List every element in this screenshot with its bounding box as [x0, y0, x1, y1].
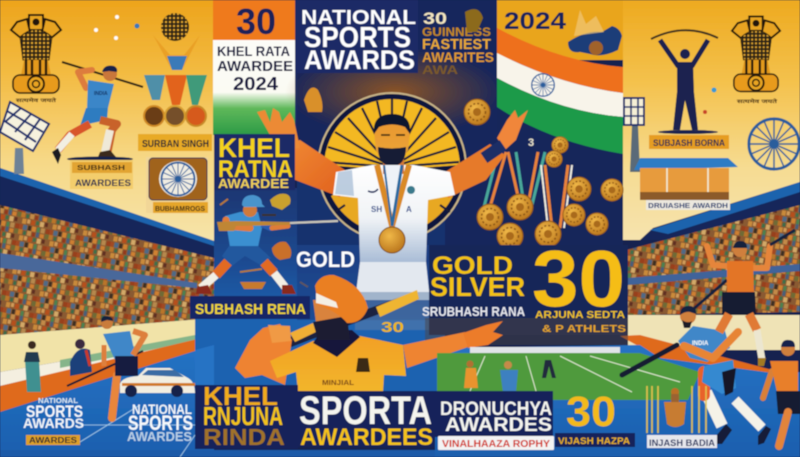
chart: playing field [437, 347, 700, 400]
torso [333, 165, 455, 262]
figure: javelin thrower [52, 62, 143, 164]
panel: national sports awards poster [285, 0, 505, 320]
arms [284, 140, 345, 197]
title: SPORTS [304, 22, 411, 54]
caption under right emblem: सत्यमेव जयते [735, 98, 779, 105]
pavilion label [646, 200, 730, 210]
panel: dronuchya awardes: VINALHAAZA ROPHY [442, 439, 550, 450]
figure: javelin thrower: INDIA [94, 91, 108, 97]
sub heading: fastest awardees: AWARITES [422, 49, 494, 65]
turban head [313, 300, 348, 338]
text: national sports awardes centre: NATIONAL [132, 401, 192, 417]
label: Surban Singh [138, 134, 212, 151]
label: awardees [70, 160, 133, 189]
label: awardees: AWARDEES [75, 178, 131, 189]
panel: dronuchya awardes [435, 391, 554, 450]
silhouette: weightlifter right [651, 30, 718, 134]
badge [26, 435, 80, 445]
figures: spectators on track [24, 339, 92, 392]
icon: camera [568, 10, 622, 55]
trophy label [438, 436, 554, 450]
panel: khel rnjuna [195, 381, 298, 450]
decorative motif blobs [270, 194, 290, 210]
text: national sports awardes centre: SPORTS [128, 412, 193, 435]
label: Surban Singh: SURBAN SINGH [142, 139, 209, 150]
number: 30: 30 [236, 1, 276, 42]
panel: chakra card [146, 157, 208, 213]
sub heading: fastest awardees: FASTIEST [422, 36, 491, 53]
text: arjuna sedta: ARJUNA SEDTA [535, 310, 625, 321]
panel: right yellow backdrop [623, 0, 800, 240]
label: Vijash Hazpa: VIJASH HAZPA [558, 436, 630, 447]
panel: award ribbon tricolour [213, 0, 299, 140]
title [301, 7, 416, 75]
panel: sporta awardees: SPORTA [299, 389, 432, 433]
text: athlets: & P ATHLETS [542, 324, 626, 335]
panel: khel ratna awardee: AWARDEE [218, 176, 289, 191]
small 30: 30 [381, 319, 404, 336]
panel: khel rnjuna: RNJUNA [203, 401, 283, 431]
icon: floodlight right [624, 98, 644, 172]
detail: small coloured dots [703, 88, 716, 114]
panel: sporta awardees [298, 389, 435, 451]
panel: pavilion building: DRUIASHE AWARDH [648, 203, 728, 210]
sub heading: fastest awardees [422, 9, 494, 77]
text: national sports awards left: NATIONAL [38, 398, 79, 405]
text: national sports awards left: AWARDS [23, 415, 84, 431]
text: national sports awardes centre: AWARDES [127, 429, 192, 444]
panel: pavilion building [634, 158, 738, 210]
label: Subhash Rena [190, 296, 310, 319]
text: gold: GOLD [296, 247, 355, 272]
icon: trophy and medals left [144, 13, 207, 126]
figure: turbaned athlete with bat [235, 275, 503, 392]
year: 2024: 2024 [504, 8, 567, 35]
icon: national emblem left [11, 15, 61, 93]
figure: orange player right [763, 340, 800, 446]
text: national sports awards left: AWARDES [29, 436, 78, 445]
panel: gold silver and big 30 [422, 234, 628, 345]
left arm [235, 324, 292, 385]
neck and head [383, 150, 404, 174]
icon: white car [120, 368, 195, 397]
gold medal [379, 227, 405, 253]
heading: Awardee: AWARDEE [217, 58, 293, 75]
panel: khel rnjuna: RINDA [203, 424, 285, 450]
heading: Khel Rata: KHEL RATA [217, 43, 290, 59]
panel: dronuchya awardes: AWARDES [445, 415, 552, 436]
right arm [403, 332, 468, 368]
text: national sports awardes centre [127, 401, 193, 444]
title: AWARDS [304, 45, 415, 75]
panel: gold silver and big 30: SILVER [430, 272, 525, 302]
panel: khel ratna awardee: KHEL [218, 133, 290, 163]
title: NATIONAL [301, 7, 416, 29]
jersey label: SH [371, 205, 382, 214]
icon: national emblem right [732, 16, 780, 91]
panel: left yellow backdrop [0, 0, 214, 262]
figure: orange player raising arms [707, 230, 795, 366]
medal ribbon [377, 165, 409, 226]
figure: rifle shooter [196, 195, 338, 294]
label: Subhash Rena: SUBHASH RENA [195, 301, 306, 318]
figure: blue batter: INDIA [692, 341, 709, 347]
emblem patch and label [356, 358, 370, 372]
figure: turbaned athlete with bat: MINJIAL [322, 380, 355, 387]
figure: hockey runner [67, 316, 145, 418]
label: Subjash Borna: SUBJASH BORNA [653, 138, 725, 149]
panel: hanging medals: 3 [528, 137, 534, 149]
icon: ashoka chakra [532, 74, 554, 96]
sub heading: fastest awardees: 30 [423, 9, 447, 28]
text: national sports awards left [23, 398, 84, 445]
name: Srubhash Rana: SRUBHASH RANA [422, 304, 526, 319]
icon: chakra sunburst behind athlete [317, 92, 467, 242]
icon: small trophy shapes [304, 88, 322, 112]
panel: khel rnjuna: KHEL [203, 381, 278, 411]
figure: blue batter [622, 280, 771, 445]
icon: cricket stumps and trophy [647, 386, 706, 433]
figure: central athlete with medal: A [406, 205, 412, 214]
icon: ashoka wheel right [749, 119, 799, 169]
panel: khel ratna awardee [214, 133, 295, 191]
panel: khel ratna awardee: RATNA [218, 156, 293, 183]
label: awardees: SUBHASH [77, 165, 125, 172]
label: Vijash Hazpa [555, 433, 635, 447]
number: gold 30 lower right: 30 [566, 388, 616, 436]
figure: central athlete with medal [257, 108, 528, 330]
field players [464, 368, 478, 388]
year: 2024: 2024 [233, 74, 278, 94]
label: Injash Badia: INJASH BADIA [649, 438, 716, 448]
tricolour wave [497, 28, 623, 93]
panel: chakra card: BUBHAMROGS [155, 206, 205, 213]
panel: centre blue background [195, 188, 445, 400]
panel: sporta awardees: AWARDEES [300, 424, 433, 451]
icon: floodlight left [0, 102, 49, 174]
panel: hanging medals [477, 137, 623, 249]
jersey [270, 336, 406, 392]
sub heading: fastest awardees: AWA [422, 63, 458, 77]
panel: right stadium and crowd [435, 205, 800, 457]
text: national sports awards left: SPORTS [26, 402, 83, 421]
caption under left emblem: सत्यमेव जयते [14, 97, 58, 104]
label: Subjash Borna [649, 135, 729, 149]
panel: flag [497, 0, 623, 270]
panel: dronuchya awardes: DRONUCHYA [440, 399, 552, 420]
number: big 30: 30 [532, 234, 625, 323]
medal row [477, 204, 503, 230]
text: gold silver: GOLD [432, 252, 513, 280]
sub heading: fastest awardees: GUINNESS [422, 25, 491, 39]
panel: left stadium and crowd [0, 205, 800, 457]
